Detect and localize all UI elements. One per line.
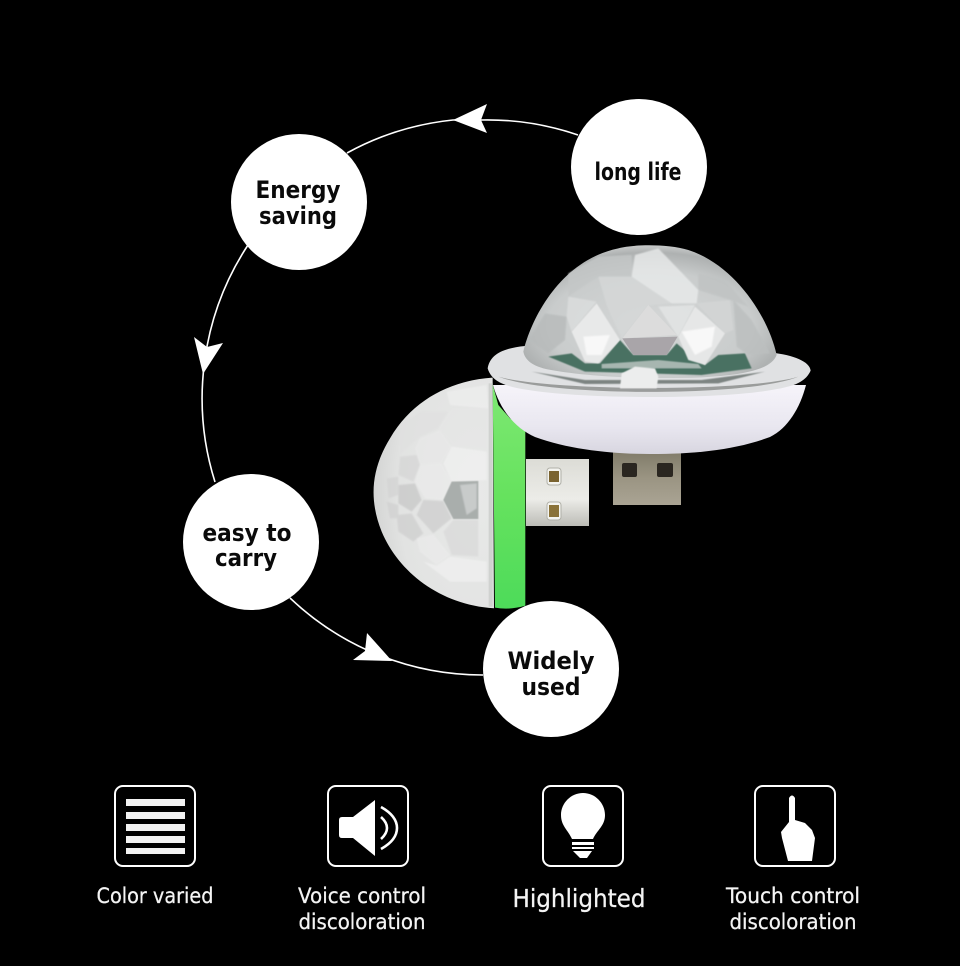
product: USB disco lights <box>374 245 811 609</box>
circle: energy saving: Energy <box>256 176 341 204</box>
arrowhead: left <box>194 337 223 374</box>
circle: long life: long life <box>594 158 682 186</box>
icon: stripes <box>126 799 185 854</box>
dome <box>523 245 777 378</box>
icon: light bulb <box>561 793 605 858</box>
arrowhead: top <box>453 104 487 133</box>
circle: easy to carry: carry <box>215 544 277 572</box>
circle: energy saving: saving <box>259 202 337 230</box>
cycle arrows ring <box>194 104 578 675</box>
arrowhead: bottom <box>353 633 392 661</box>
feature: voice control <box>298 786 426 934</box>
left USB plug <box>526 459 589 526</box>
feature: touch control: discoloration <box>730 910 856 934</box>
feature: touch control: Touch control <box>725 884 860 908</box>
feature: color varied: Color varied <box>96 884 214 908</box>
feature: voice control: discoloration <box>298 910 426 934</box>
feature: touch control <box>725 786 860 934</box>
icon: speaker <box>339 800 397 856</box>
circle: easy to carry <box>183 474 319 610</box>
rim <box>488 346 811 397</box>
top lamp USB plug <box>613 450 681 505</box>
left lamp <box>374 378 525 609</box>
circuit board <box>548 340 752 375</box>
feature: highlighted: Highlighted <box>512 884 646 913</box>
left lamp green base <box>493 384 525 609</box>
left lamp hemisphere <box>374 378 494 608</box>
circle: energy saving <box>231 134 367 270</box>
feature: voice control: Voice control <box>298 884 426 908</box>
circle: long life <box>571 99 707 235</box>
feature: highlighted <box>512 786 646 913</box>
circle: widely used: Widely <box>508 647 595 675</box>
icon: pointing hand <box>781 796 815 861</box>
feature: color varied <box>96 786 214 908</box>
circle: widely used: used <box>522 673 580 701</box>
facets <box>528 248 770 355</box>
top lamp head <box>488 245 811 397</box>
top lamp bowl <box>493 385 806 454</box>
circle: widely used <box>483 601 619 737</box>
circle: easy to carry: easy to <box>202 519 292 547</box>
